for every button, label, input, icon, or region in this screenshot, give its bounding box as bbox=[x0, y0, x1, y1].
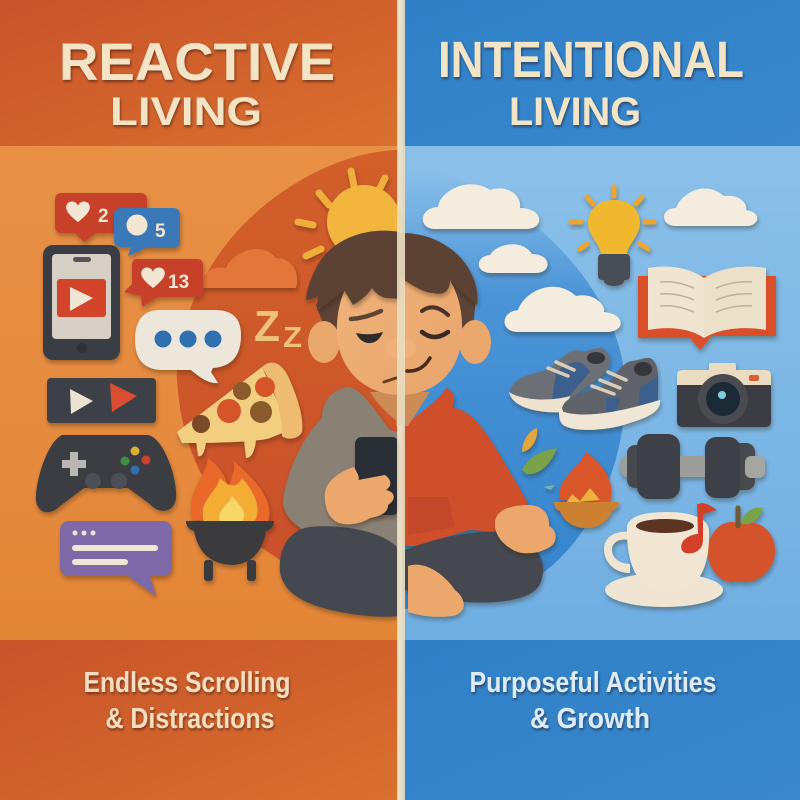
icon: smartphone with video bbox=[43, 245, 120, 360]
left leg bbox=[280, 526, 398, 617]
icon: cloud behind sun bbox=[203, 249, 297, 288]
icon: purple message window bbox=[60, 521, 172, 596]
panel: intentional background bbox=[402, 0, 800, 800]
icon: coffee cup, note and apple bbox=[604, 503, 775, 607]
panel: reactive background bbox=[0, 0, 398, 800]
icon: leaves bbox=[522, 428, 557, 490]
heading: reactive living bbox=[59, 33, 335, 134]
red hoodie bbox=[402, 388, 528, 546]
icon: cloud top right bbox=[664, 188, 757, 226]
icon: game controller bbox=[36, 435, 176, 512]
icon: zz: Z bbox=[254, 302, 280, 351]
brow left bbox=[351, 311, 381, 319]
caption: reactive bbox=[84, 667, 290, 735]
icon: zz: Z bbox=[283, 322, 302, 354]
nose bbox=[386, 337, 416, 359]
frown bbox=[384, 378, 396, 382]
caption: intentional bbox=[470, 667, 716, 735]
icon: like badge 2: 2 bbox=[98, 206, 109, 227]
hair right bbox=[400, 233, 477, 305]
icon: camera bbox=[677, 363, 771, 427]
neck bbox=[370, 392, 430, 426]
heading: intentional living bbox=[438, 31, 744, 134]
icon: chat bubble bbox=[135, 310, 241, 383]
icon: center cloud bbox=[504, 287, 621, 332]
heading: reactive living: LIVING bbox=[110, 90, 262, 134]
heading: intentional living: INTENTIONAL bbox=[438, 31, 744, 88]
icon: pizza slice bbox=[177, 363, 302, 458]
divider bbox=[397, 0, 405, 800]
smile bbox=[407, 358, 430, 371]
sleepy eye left bbox=[356, 332, 383, 343]
icon: open book bbox=[638, 266, 776, 350]
icon: small cloud bbox=[479, 244, 548, 273]
caption: intentional: Purposeful Activities bbox=[470, 667, 716, 699]
heading: intentional living: LIVING bbox=[509, 90, 641, 134]
caption: reactive: & Distractions bbox=[106, 703, 274, 735]
icon: sneakers bbox=[509, 348, 660, 430]
icon: comment badge 5: 5 bbox=[155, 221, 166, 242]
icon: video player bar bbox=[47, 378, 156, 423]
icon: flame bowl bbox=[554, 452, 619, 528]
icon: campfire cauldron bbox=[186, 458, 274, 581]
face bbox=[337, 250, 462, 395]
brow right bbox=[422, 307, 448, 315]
ear right bbox=[459, 320, 491, 364]
icon: cloud top left bbox=[423, 184, 539, 229]
caption: reactive: Endless Scrolling bbox=[84, 667, 290, 699]
icon: like badge 2 bbox=[55, 193, 147, 242]
ear left bbox=[308, 321, 340, 363]
grey hoodie bbox=[283, 387, 398, 548]
hand holding phone bbox=[325, 467, 394, 524]
red hoodie pocket bbox=[408, 497, 455, 535]
back hair bbox=[316, 262, 476, 343]
right leg bbox=[405, 532, 543, 602]
closed eye right bbox=[422, 332, 448, 337]
figure: seated child bbox=[280, 231, 556, 617]
hair left bbox=[306, 231, 400, 310]
icon: dumbbell bbox=[620, 434, 765, 499]
icon: lightbulb bbox=[571, 187, 654, 286]
hand in lap bbox=[495, 505, 556, 553]
caption: intentional: & Growth bbox=[530, 703, 650, 735]
icon: sun bbox=[298, 171, 401, 259]
phone bbox=[355, 437, 399, 515]
icon: like badge 13 bbox=[124, 259, 203, 307]
bare foot bbox=[408, 565, 464, 617]
icon: comment badge 5 bbox=[114, 208, 180, 256]
icon: like badge 13: 13 bbox=[168, 272, 189, 293]
heading: reactive living: REACTIVE bbox=[59, 33, 335, 92]
icon: zz bbox=[254, 302, 302, 354]
